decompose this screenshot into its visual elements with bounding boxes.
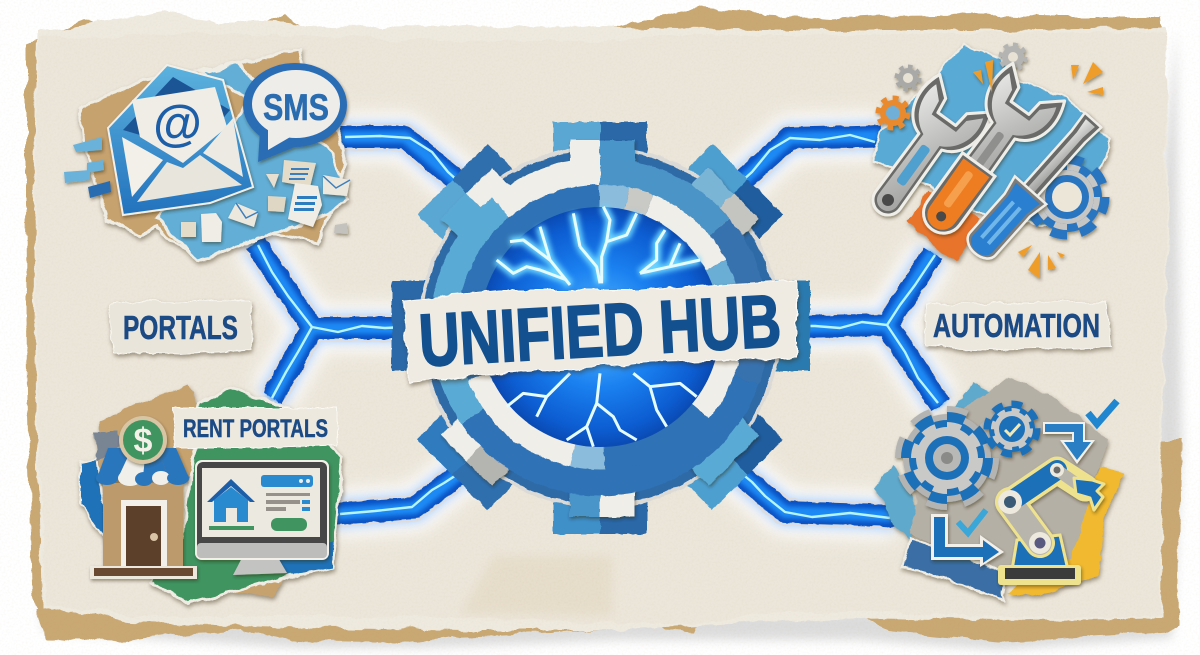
icon: SMS speech bubble [243, 63, 347, 162]
label: rent portals: RENT PORTALS [183, 415, 328, 443]
gear outer ring [419, 146, 781, 508]
panel: email and SMS collage [64, 50, 350, 260]
panel: rent portals collage [80, 385, 343, 603]
icon: storefront [90, 448, 197, 579]
icon: orange-handled wrench [902, 60, 1069, 251]
electric core disc [480, 207, 720, 447]
connector: email to hub [340, 136, 470, 192]
icon: small gears [878, 45, 1025, 128]
icon: envelope with at sign [108, 65, 253, 215]
torn paper backing [80, 385, 343, 603]
gear middle ring segments [445, 172, 755, 482]
icon: orange sparks [973, 60, 1103, 279]
label: rent portals [173, 408, 337, 448]
torn paper backing [873, 378, 1123, 600]
gear inner ring segments [469, 196, 731, 458]
icon: computer monitor with house listing [195, 460, 329, 575]
connector: tools to hub [730, 135, 880, 192]
torn paper backing [80, 50, 347, 260]
icon: scattered documents and mail [64, 137, 350, 242]
panel: tools collage [849, 45, 1110, 279]
connector: automation branch [795, 253, 940, 405]
icon: screwdriver [959, 106, 1109, 267]
icon: small gear with check [987, 404, 1037, 454]
label: portals [108, 301, 254, 354]
arrow: process flow right [931, 514, 1004, 567]
connector: rent portals to hub [335, 468, 466, 514]
title banner: unified hub: UNIFIED HUB [417, 279, 783, 382]
panel: automation collage [873, 378, 1123, 600]
icon: left wrench [849, 71, 996, 234]
lightning bolts [497, 207, 700, 447]
connector: automation to hub [732, 468, 895, 518]
icon: check marks [958, 401, 1117, 533]
gear front teeth [441, 140, 759, 517]
icon: envelope with at sign: @ [153, 95, 202, 151]
icon: robot arm [998, 463, 1104, 585]
torn paper backing [873, 45, 1110, 263]
icon: blue gear [1029, 159, 1105, 235]
panel: central hub gear [392, 122, 810, 534]
arrow: process flow down [1043, 422, 1095, 464]
label: automation [927, 302, 1111, 350]
gear back teeth [392, 122, 810, 534]
label: automation: AUTOMATION [933, 307, 1100, 344]
icon: SMS speech bubble: SMS [263, 87, 329, 128]
icon: large gear [900, 411, 994, 505]
icon: dollar coin [119, 416, 167, 464]
fold tone bottom [460, 556, 612, 616]
connector: portals branch [255, 243, 410, 398]
icon: dollar coin: $ [134, 422, 153, 460]
label: portals: PORTALS [123, 309, 238, 346]
